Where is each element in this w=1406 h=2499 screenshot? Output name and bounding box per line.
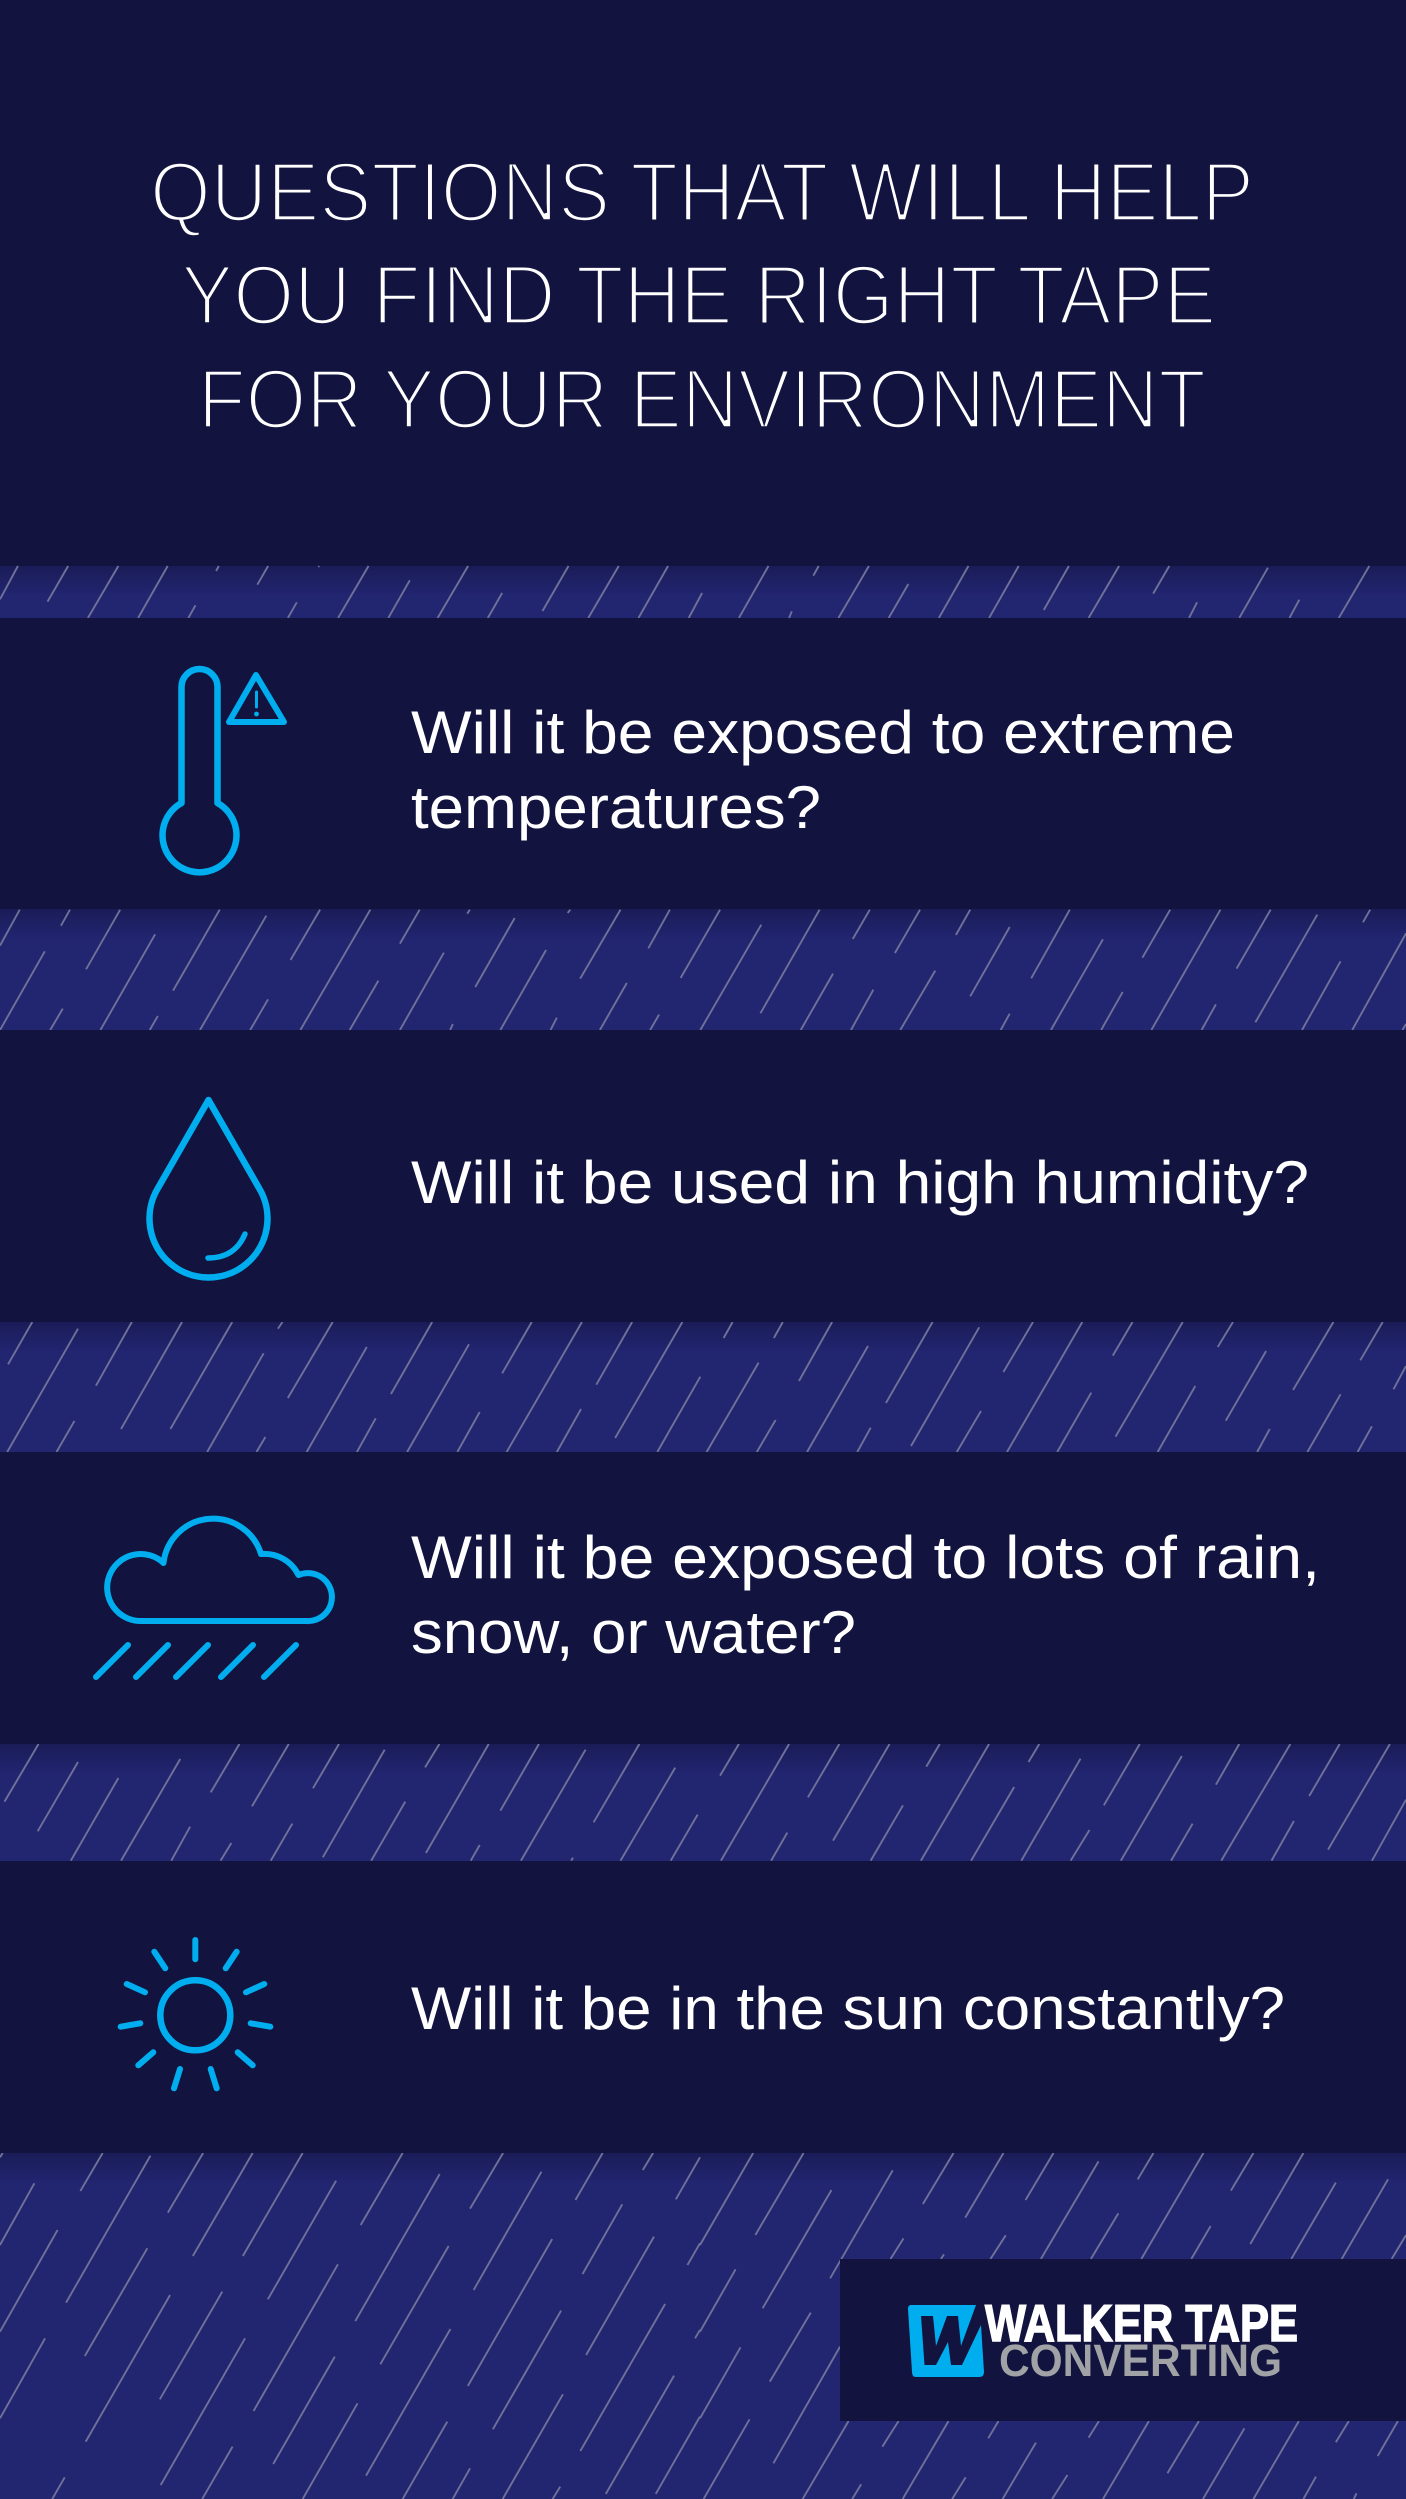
logo mark (908, 2305, 986, 2377)
logo wordmark: WALKER TAPE (985, 2295, 1298, 2353)
question text: Will it be exposed to lots of rain, (411, 1524, 1320, 1591)
question text: snow, or water? (411, 1599, 856, 1666)
title: QUESTIONS THAT WILL HELP (150, 145, 1254, 239)
band 2 rain pattern (0, 909, 1406, 1030)
icon: thermometer with warning triangle (162, 669, 284, 872)
panel: rain, snow, water (0, 1452, 1406, 1744)
band 3 rain pattern (0, 1322, 1406, 1452)
title: YOU FIND THE RIGHT TAPE (181, 248, 1216, 342)
panel: constant sun (0, 1861, 1406, 2153)
logo wordmark (985, 2295, 1298, 2386)
logo wordmark: CONVERTING (999, 2335, 1282, 2386)
bottom band rain pattern (0, 2153, 1406, 2499)
icon: sun (121, 1940, 270, 2088)
band 4 rain pattern (0, 1744, 1406, 1861)
band 1 rain pattern (0, 566, 1406, 618)
question text: temperatures? (411, 774, 821, 841)
panel: high humidity (0, 1030, 1406, 1322)
question text: Will it be in the sun constantly? (411, 1975, 1285, 2042)
question text: Will it be exposed to extreme (411, 699, 1235, 766)
panel: extreme temperatures (0, 618, 1406, 909)
icon: rain cloud (96, 1519, 332, 1677)
logo panel (840, 2259, 1406, 2421)
title: FOR YOUR ENVIRONMENT (198, 352, 1206, 446)
title (150, 145, 1254, 446)
question text: Will it be used in high humidity? (411, 1149, 1309, 1216)
icon: water drop (150, 1100, 268, 1278)
